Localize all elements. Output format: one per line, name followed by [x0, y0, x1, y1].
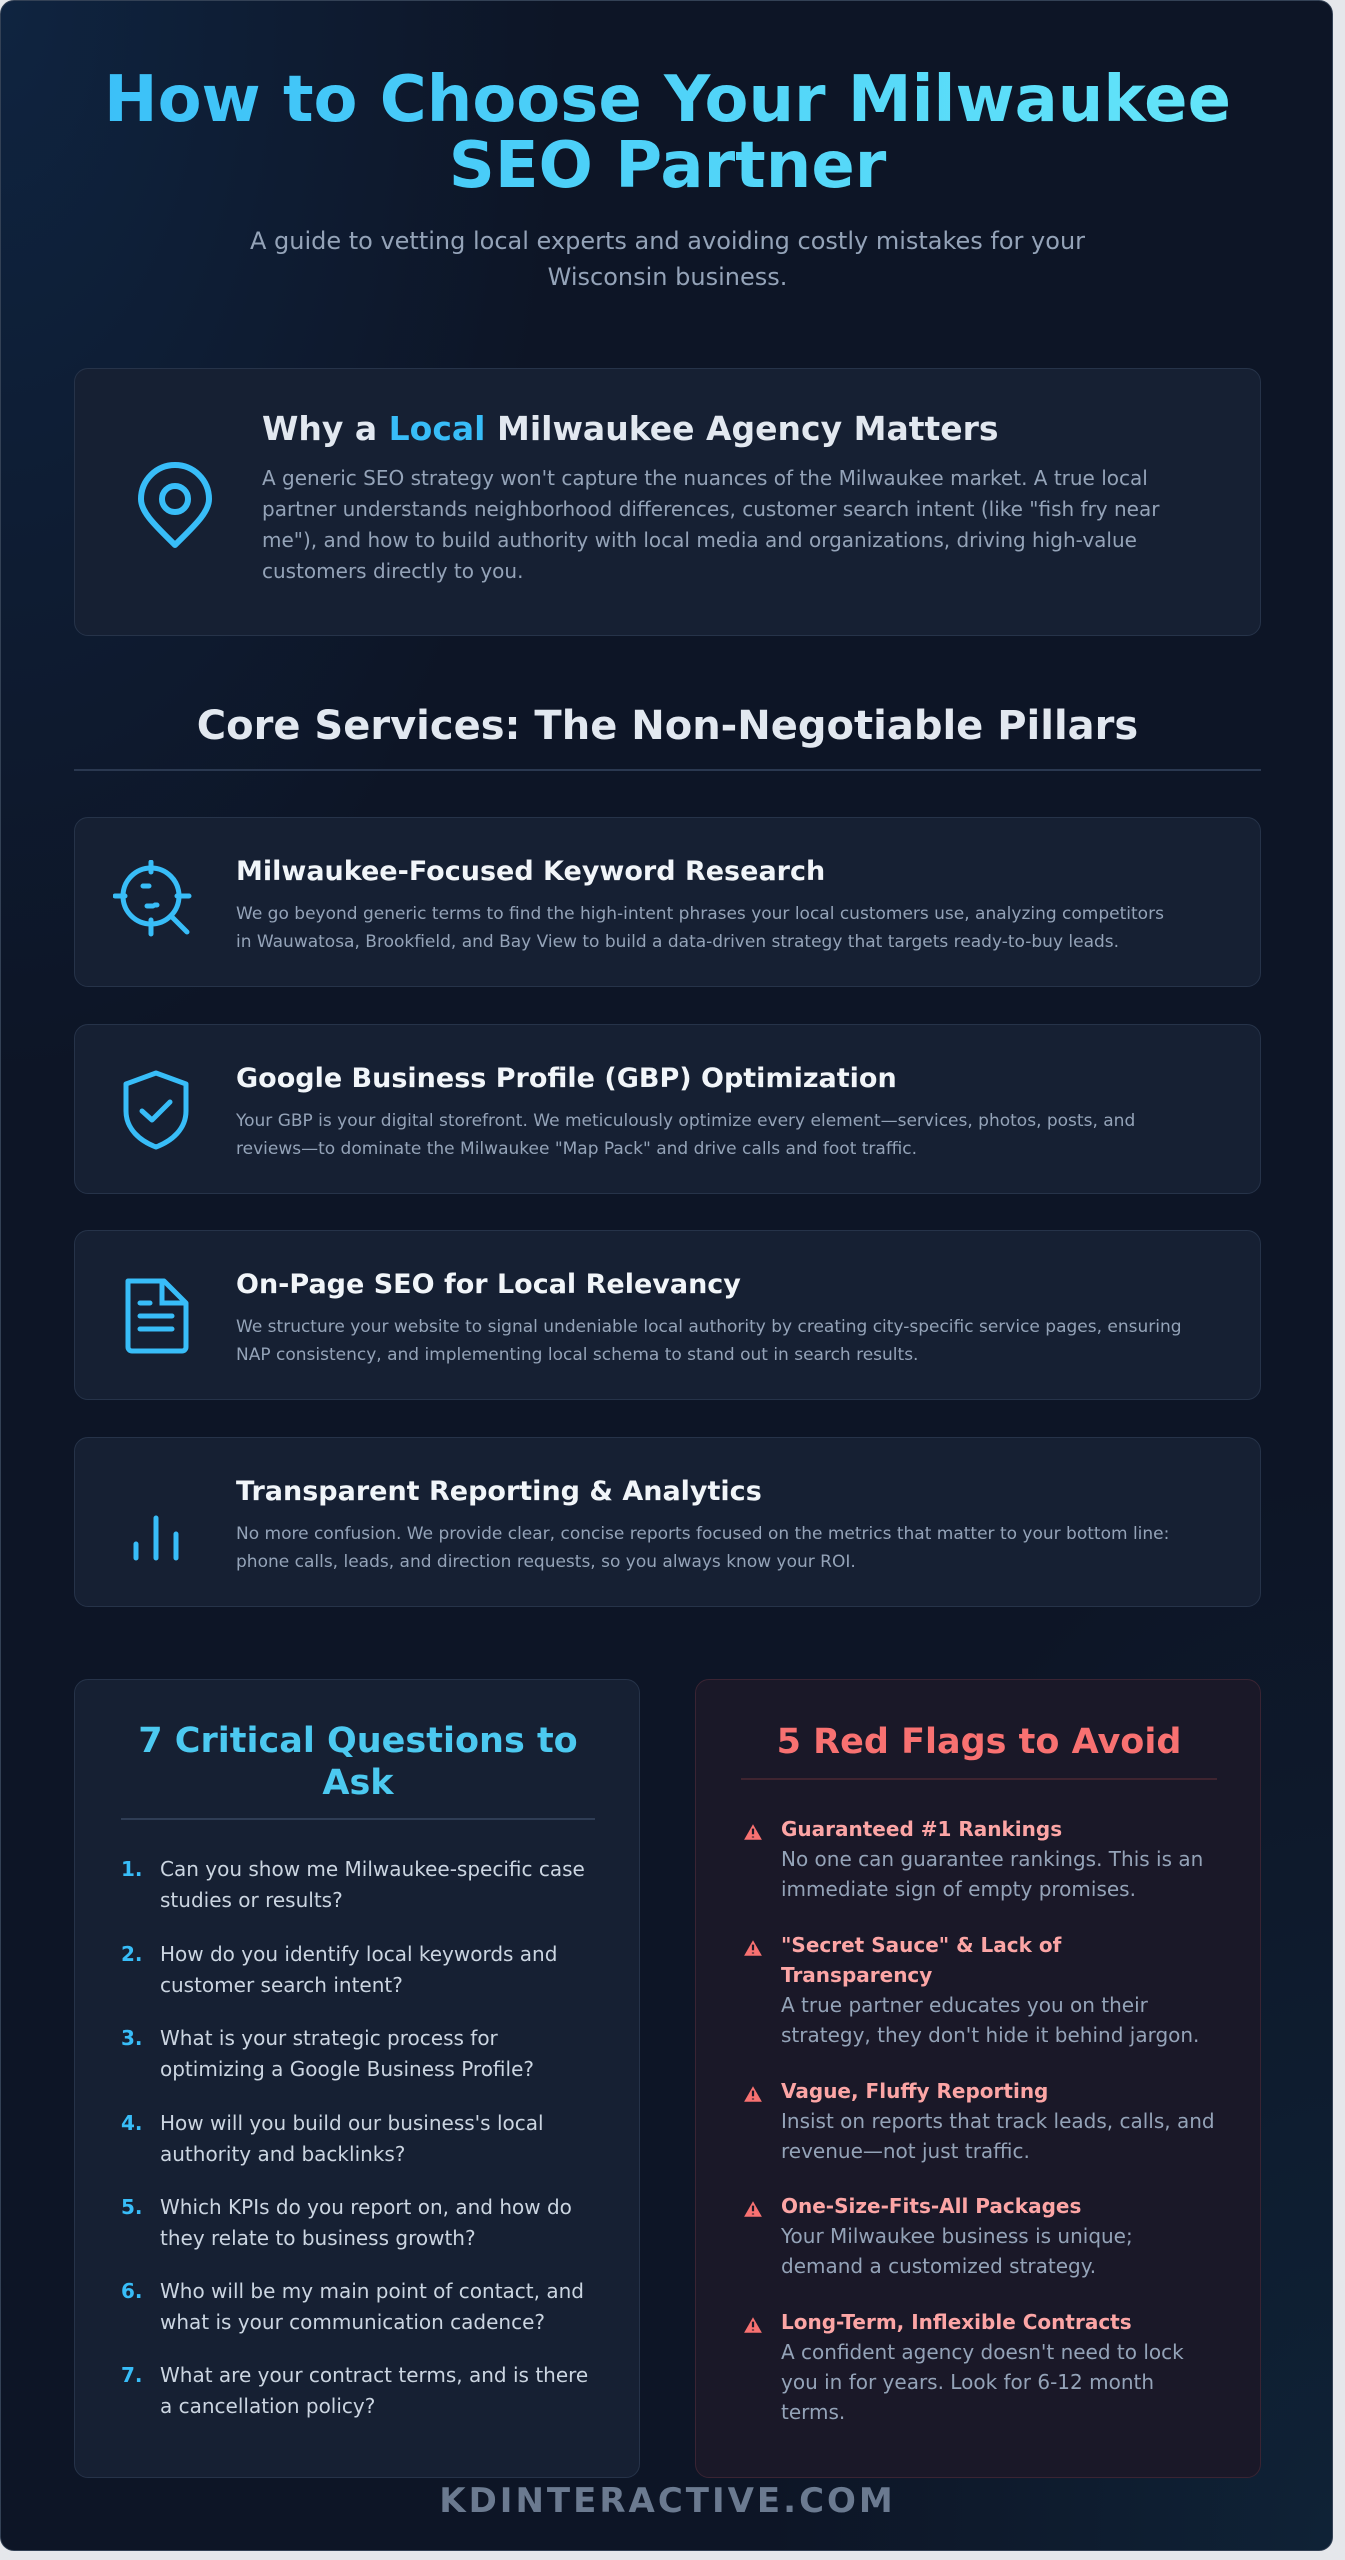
panel: keyword research: Milwaukee-Focused Keyword Research	[236, 856, 825, 887]
icon: target search	[113, 860, 192, 936]
red flag list: Vague, Fluffy Reporting	[781, 2079, 1048, 2103]
red flag list: you in for years. Look for 6-12 month	[781, 2370, 1154, 2394]
title: SEO Partner	[449, 129, 886, 203]
panel: why local	[74, 368, 1261, 636]
red flag list: Long-Term, Inflexible Contracts	[781, 2310, 1132, 2334]
panel: reporting: No more confusion. We provide clear, concise reports focused on the metrics that matter to your bottom line: phone calls, leads, and direction requests, so you always know your ROI.	[236, 1524, 1169, 1572]
question list: 2.	[121, 1942, 143, 1966]
question list: How do you identify local keywords and customer search intent?	[160, 1942, 557, 1997]
question list: 3.	[121, 2026, 143, 2050]
panel: reporting	[74, 1437, 1261, 1607]
question list	[121, 1857, 588, 2418]
icon: shield check	[124, 1070, 188, 1150]
heading: Why a Local Milwaukee Agency Matters	[262, 409, 999, 448]
panel: 7 questions	[74, 1679, 640, 2478]
icon: map pin	[138, 462, 212, 548]
question list: 1.	[121, 1857, 143, 1881]
red flag list: Your Milwaukee business is unique;	[781, 2224, 1133, 2248]
red flag list: A true partner educates you on their strategy, they don't hide it behind jargon.	[781, 1993, 1199, 2047]
subtitle: A guide to vetting local experts and avoiding costly mistakes for your Wisconsin business.	[250, 227, 1085, 291]
red flag list: No one can guarantee rankings. This is an immediate sign of empty promises.	[781, 1847, 1203, 1901]
red flag list: demand a customized strategy.	[781, 2254, 1096, 2278]
question list: Who will be my main point of contact, and what is your communication cadence?	[160, 2279, 584, 2334]
heading: 5 Red Flags to Avoid	[777, 1722, 1181, 1762]
red flag list: One-Size-Fits-All Packages	[781, 2194, 1081, 2218]
question list: 7.	[121, 2363, 143, 2387]
panel: keyword research: We go beyond generic terms to find the high-intent phrases your local customers use, analyzing competitors	[236, 904, 1164, 924]
panel: GBP: Your GBP is your digital storefront. We meticulously optimize every element—services, photos, posts, and reviews—to dominate the Milwaukee "Map Pack" and drive calls and foot traffic.	[236, 1111, 1135, 1159]
red flag list	[744, 1817, 1215, 2424]
red flag list: Transparency	[781, 1963, 932, 1987]
panel: on-page: On-Page SEO for Local Relevancy	[236, 1269, 741, 1300]
question list: What are your contract terms, and is there a cancellation policy?	[160, 2363, 588, 2418]
question list: 6.	[121, 2279, 143, 2303]
icon: bar chart	[134, 1516, 178, 1560]
panel: GBP	[74, 1024, 1261, 1194]
red flag list: A confident agency doesn't need to lock	[781, 2340, 1184, 2364]
red flag list: Insist on reports that track leads, calls, and revenue—not just traffic.	[781, 2109, 1215, 2163]
body text: A generic SEO strategy won't capture the nuances of the Milwaukee market. A true local partner understands neighborhood differences, customer search intent (like "fish fry near me"), and how to build authority with local media and organizations, driving high-value customers directly to you.	[262, 466, 1159, 583]
red flag list: Guaranteed #1 Rankings	[781, 1817, 1062, 1841]
panel: keyword research: in Wauwatosa, Brookfield, and Bay View to build a data-driven strategy that targets ready-to-buy leads.	[236, 932, 1119, 952]
question list: 4.	[121, 2111, 143, 2135]
red flag list: terms.	[781, 2400, 845, 2424]
red flag list: "Secret Sauce" & Lack of	[781, 1933, 1061, 1957]
question list: What is your strategic process for optimizing a Google Business Profile?	[160, 2026, 534, 2081]
question list: How will you build our business's local authority and backlinks?	[160, 2111, 544, 2166]
section heading: Core Services: The Non-Negotiable Pillars	[197, 703, 1138, 749]
icon: document	[126, 1278, 188, 1354]
title: How to Choose Your Milwaukee	[104, 63, 1231, 137]
heading: 7 Critical Questions to Ask	[138, 1721, 578, 1803]
panel: on-page: We structure your website to signal undeniable local authority by creating city-specific service pages, ensuring NAP consistency, and implementing local schema to stand out in search results.	[236, 1317, 1182, 1365]
panel: GBP: Google Business Profile (GBP) Optimization	[236, 1063, 897, 1094]
panel: reporting: Transparent Reporting & Analytics	[236, 1476, 762, 1507]
panel: red flags	[695, 1679, 1261, 2478]
question list: Which KPIs do you report on, and how do they relate to business growth?	[160, 2195, 572, 2250]
footer brand: KDINTERACTIVE.COM	[439, 2481, 896, 2521]
question list: 5.	[121, 2195, 143, 2219]
title	[1, 67, 1334, 199]
panel: on-page	[74, 1230, 1261, 1400]
panel: keyword research	[74, 817, 1261, 987]
question list: Can you show me Milwaukee-specific case studies or results?	[160, 1857, 585, 1912]
